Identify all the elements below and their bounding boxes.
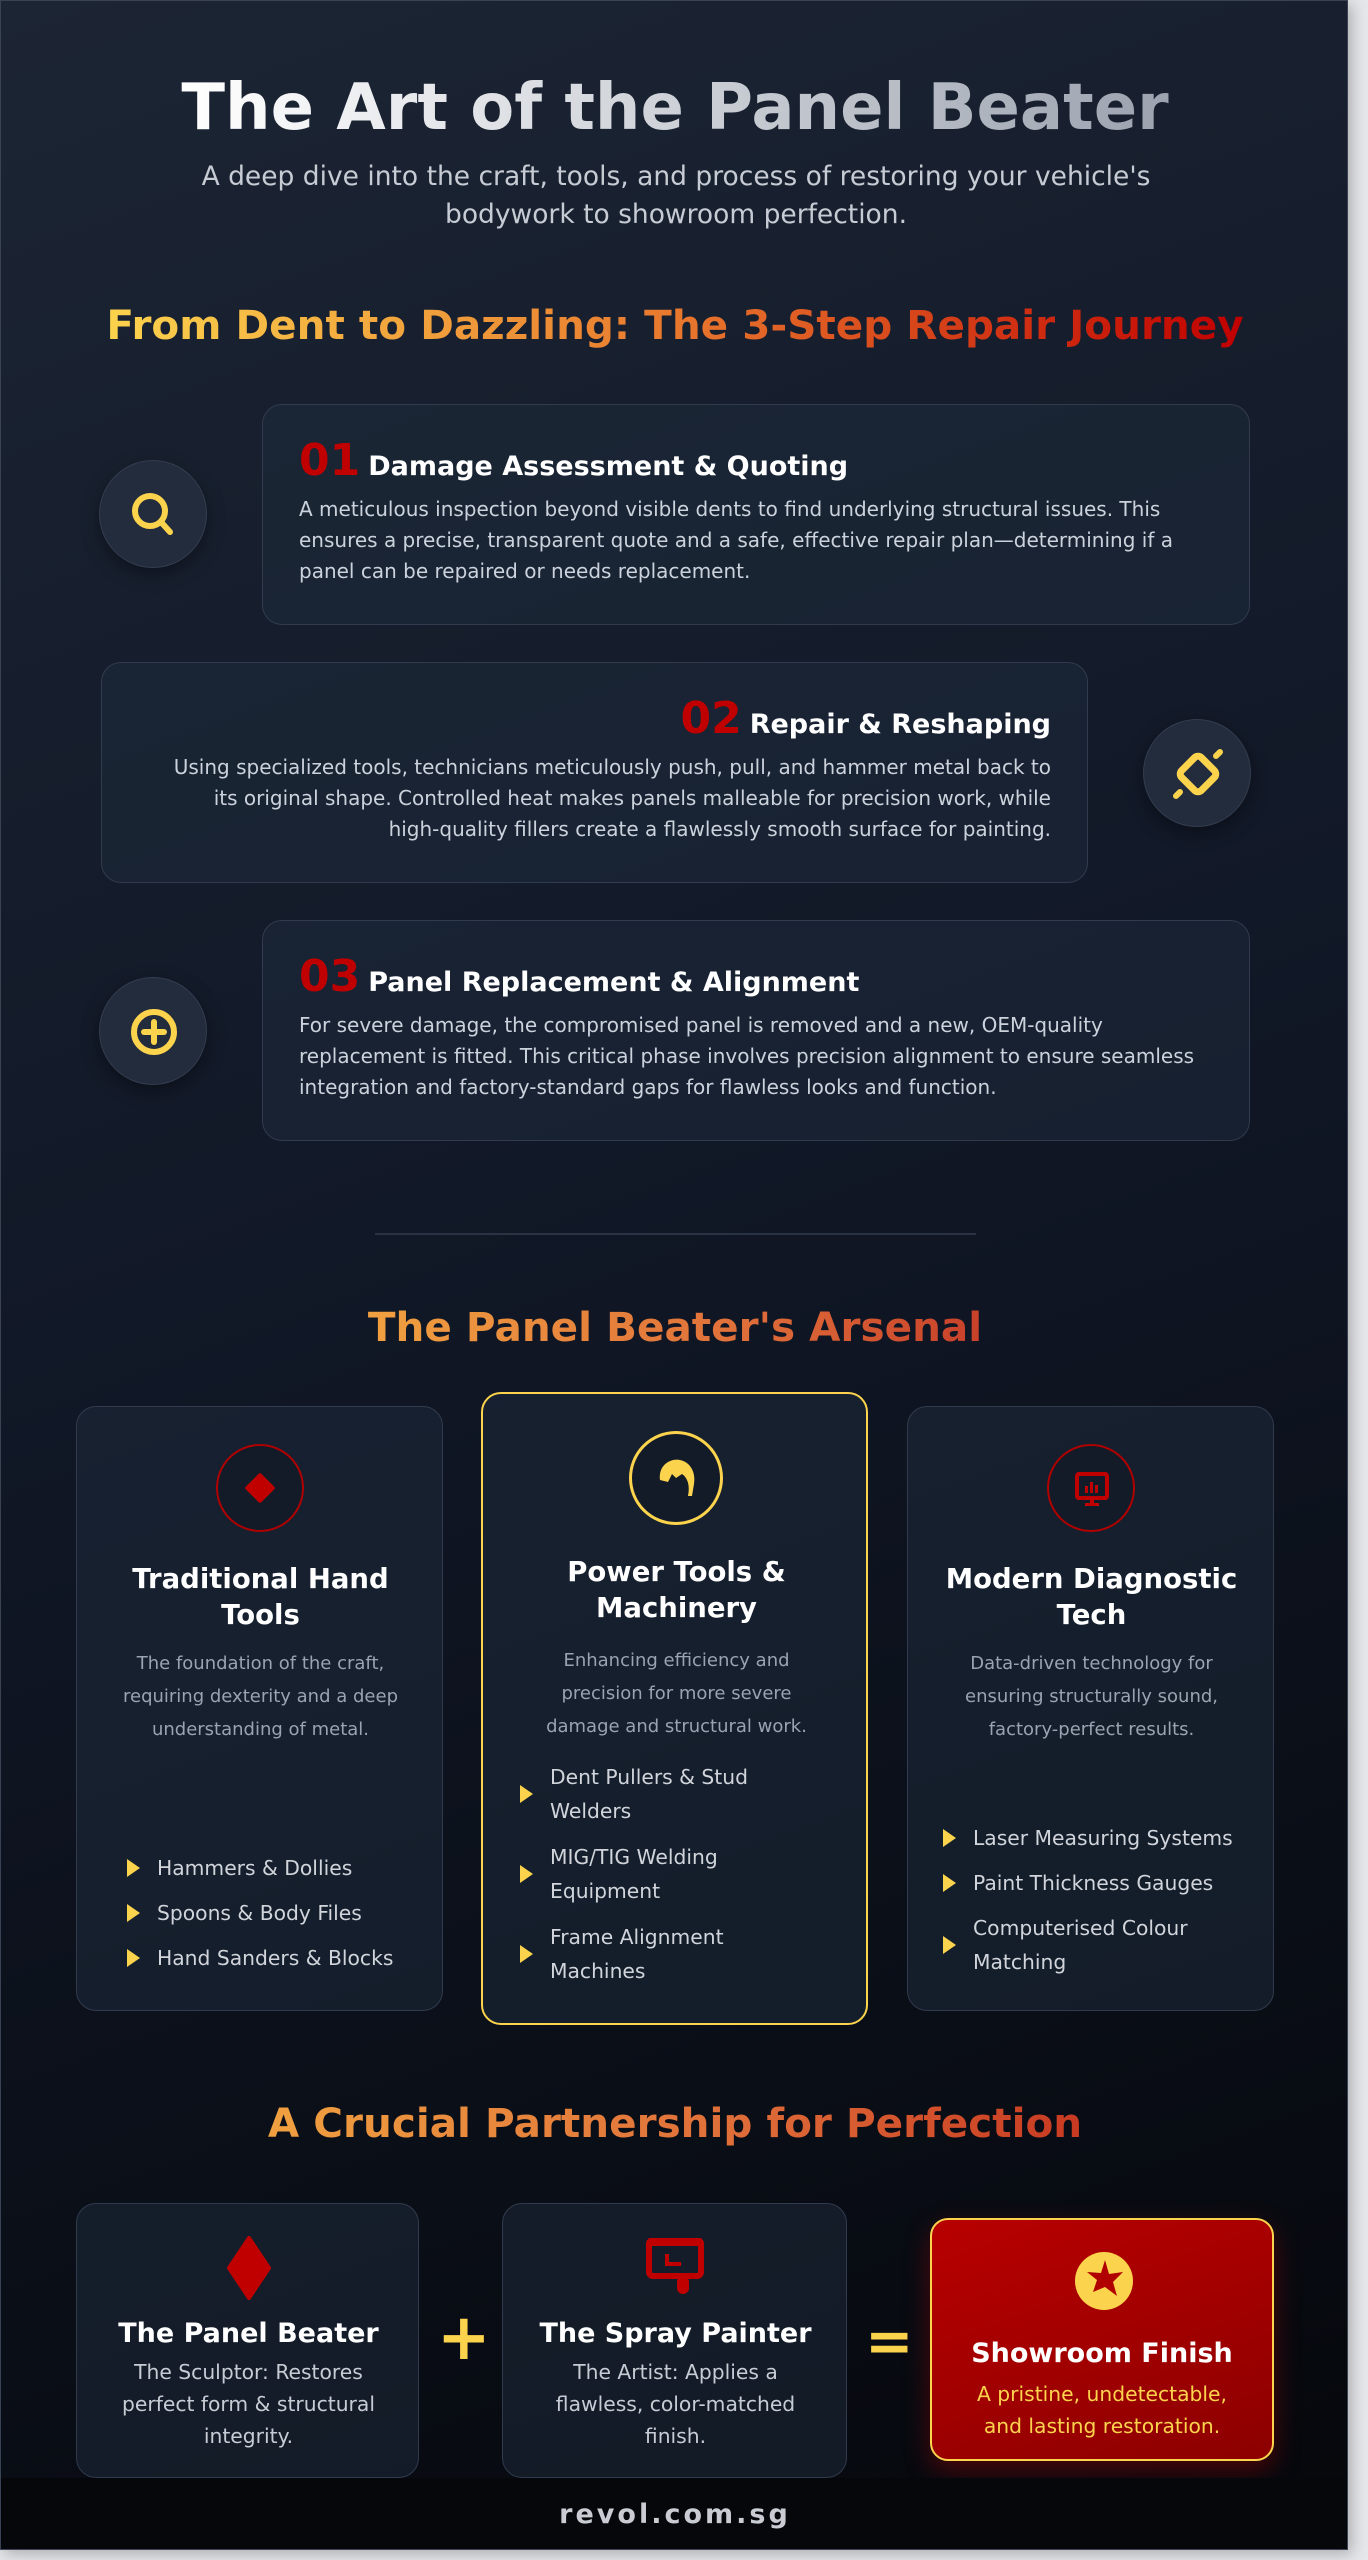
- step 2 heading: 02 Repair & Reshaping: [680, 693, 1051, 744]
- panel: hand tools: [76, 1406, 443, 2011]
- list: Paint Thickness Gauges: [973, 1871, 1213, 1895]
- list: MIG/TIG Welding Equipment: [550, 1845, 718, 1903]
- icon: plus circle: [99, 977, 207, 1085]
- heading: arsenal: The Panel Beater's Arsenal: [368, 1303, 982, 1351]
- description: The Sculptor: Restores perfect form & structural integrity.: [122, 2360, 375, 2448]
- description: The foundation of the craft, requiring dexterity and a deep understanding of metal.: [123, 1653, 398, 1740]
- list: Computerised Colour Matching: [973, 1916, 1188, 1974]
- panel: panel beater: [76, 2203, 419, 2478]
- list: Laser Measuring Systems: [973, 1826, 1233, 1850]
- panel: step 3: [262, 920, 1250, 1141]
- title: Power Tools & Machinery: [567, 1556, 786, 1624]
- step 1 heading: 01 Damage Assessment & Quoting: [299, 435, 848, 486]
- list: [520, 1765, 748, 1983]
- icon: gauge: [629, 1431, 723, 1525]
- step 2 text: Using specialized tools, technicians meticulously push, pull, and hammer metal back to its original shape. Controlled heat makes panels malleable for precision work, while high-quality fillers create a flawlessly smooth surface for painting.: [174, 755, 1051, 841]
- panel: diagnostic: [907, 1406, 1274, 2011]
- plus sign: +: [437, 2301, 491, 2375]
- list: [943, 1826, 1233, 1974]
- footer: revol.com.sg: [559, 2499, 791, 2530]
- icon: magnifier: [99, 460, 207, 568]
- list: [127, 1856, 393, 1970]
- panel: power tools: [481, 1392, 868, 2025]
- title: The Art of the Panel Beater: [181, 71, 1169, 145]
- icon: reshaping: [1143, 719, 1251, 827]
- list: Spoons & Body Files: [157, 1901, 362, 1925]
- step 1 text: A meticulous inspection beyond visible dents to find underlying structural issues. This ensures a precise, transparent quote and a safe, effective repair plan—determining if a panel can be repaired or needs replacement.: [299, 497, 1173, 583]
- panel: step 2: [101, 662, 1088, 883]
- description: Data-driven technology for ensuring structurally sound, factory-perfect results.: [965, 1653, 1218, 1740]
- heading: partnership: A Crucial Partnership for Perfection: [268, 2099, 1082, 2147]
- step 3 heading: 03 Panel Replacement & Alignment: [299, 951, 859, 1002]
- footer: [1, 2478, 1349, 2551]
- subtitle: A deep dive into the craft, tools, and process of restoring your vehicle's bodywork to showroom perfection.: [202, 161, 1150, 230]
- heading: repair journey: From Dent to Dazzling: The 3-Step Repair Journey: [106, 301, 1244, 349]
- list: Dent Pullers & Stud Welders: [550, 1765, 748, 1823]
- description: Enhancing efficiency and precision for more severe damage and structural work.: [546, 1650, 807, 1737]
- list: Frame Alignment Machines: [550, 1925, 724, 1983]
- description: A pristine, undetectable, and lasting restoration.: [977, 2382, 1227, 2438]
- title: Showroom Finish: [971, 2338, 1233, 2369]
- title: The Panel Beater: [118, 2318, 379, 2349]
- title: The Spray Painter: [539, 2318, 812, 2349]
- icon: diamond: [216, 1444, 304, 1532]
- title: Traditional Hand Tools: [132, 1563, 389, 1631]
- title: Modern Diagnostic Tech: [946, 1563, 1237, 1631]
- step 3 text: For severe damage, the compromised panel is removed and a new, OEM-quality replacement is fitted. This critical phase involves precision alignment to ensure seamless integration and factory-standard gaps for flawless looks and function.: [299, 1013, 1194, 1099]
- equals sign: =: [865, 2307, 914, 2375]
- icon: red diamond: [227, 2236, 271, 2300]
- list: Hand Sanders & Blocks: [157, 1946, 393, 1970]
- icon: monitor: [1047, 1444, 1135, 1532]
- list: Hammers & Dollies: [157, 1856, 352, 1880]
- panel: showroom finish: [930, 2218, 1274, 2461]
- panel: spray painter: [502, 2203, 847, 2478]
- icon: paint roller: [646, 2238, 704, 2294]
- description: The Artist: Applies a flawless, color-matched finish.: [556, 2360, 795, 2448]
- icon: sparkle: [1075, 2252, 1133, 2310]
- panel: step 1: [262, 404, 1250, 625]
